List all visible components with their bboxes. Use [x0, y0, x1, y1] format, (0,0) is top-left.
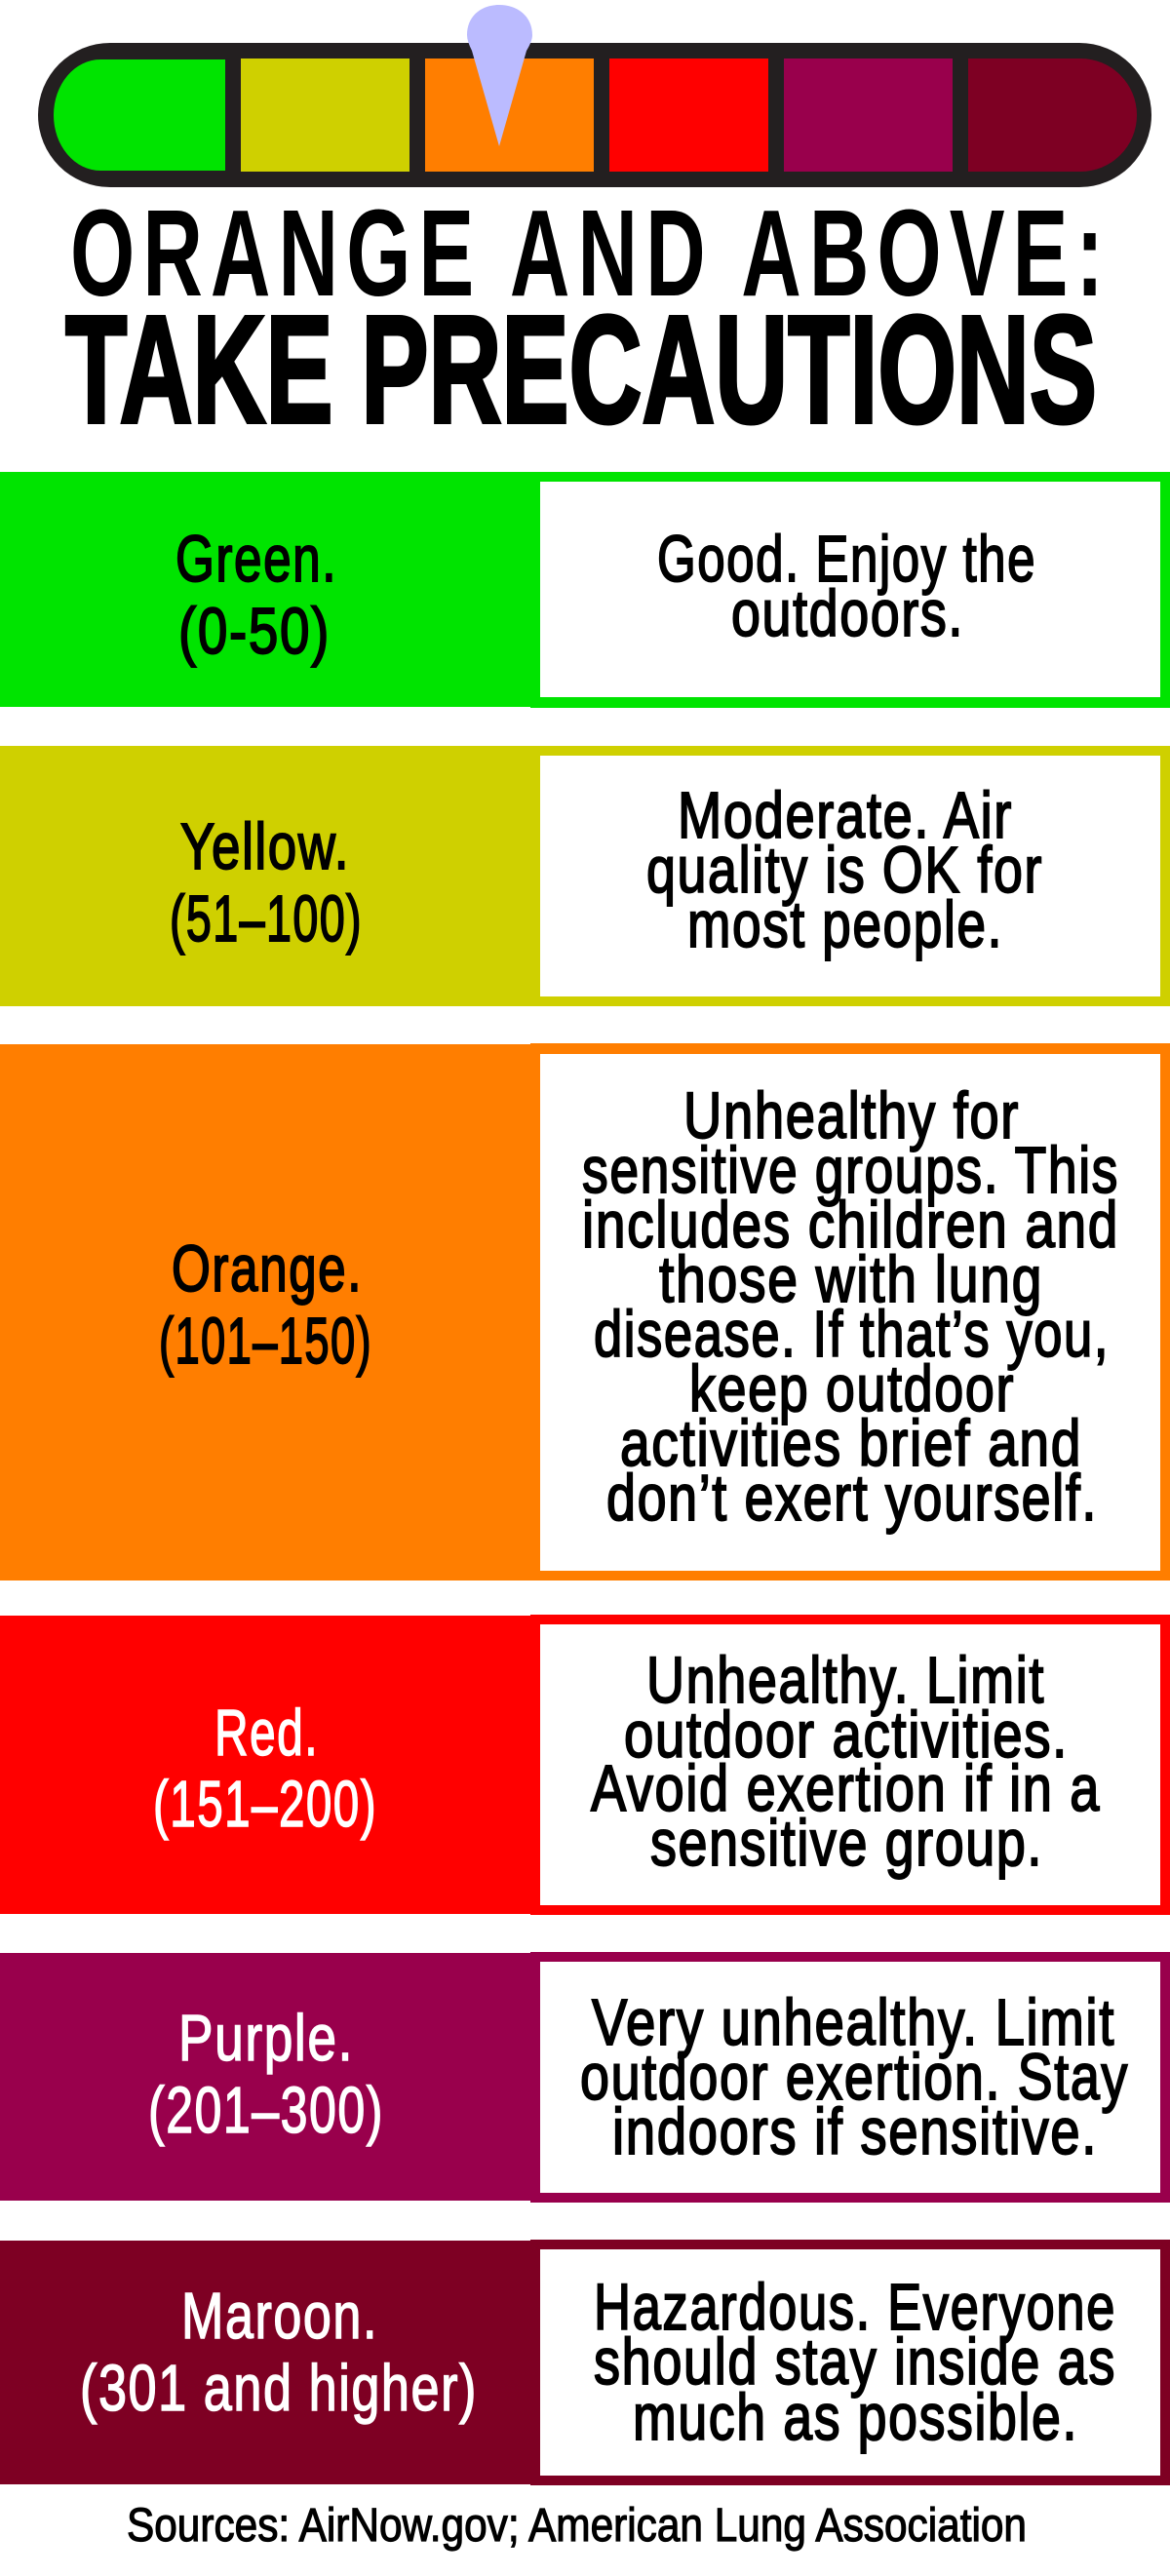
green description	[657, 523, 1036, 650]
yellow description	[646, 779, 1043, 961]
orange label: Orange.	[172, 1232, 363, 1306]
red label	[153, 1697, 377, 1841]
maroon description	[594, 2271, 1116, 2454]
green description: outdoors.	[731, 577, 964, 650]
orange label	[159, 1232, 372, 1378]
green label	[176, 523, 337, 668]
orange description: activities brief and	[620, 1407, 1082, 1480]
green description: Good. Enjoy the	[657, 523, 1036, 596]
green label: Green.	[176, 523, 337, 596]
purple label: (201–300)	[148, 2074, 384, 2147]
orange description: keep outdoor	[689, 1352, 1015, 1425]
icon: gauge pointer	[467, 5, 532, 146]
yellow label: Yellow.	[180, 810, 350, 883]
panel: red	[0, 1615, 1170, 1915]
panel: green	[0, 472, 1170, 708]
maroon label: Maroon.	[181, 2280, 378, 2353]
panel: maroon	[0, 2240, 1170, 2485]
yellow label: (51–100)	[170, 882, 363, 956]
green label: (0-50)	[178, 595, 331, 668]
red description: sensitive group.	[650, 1807, 1043, 1880]
yellow label	[170, 810, 363, 956]
orange description: those with lung	[659, 1243, 1043, 1316]
orange description: Unhealthy for	[683, 1079, 1020, 1152]
red description: Unhealthy. Limit	[646, 1644, 1045, 1717]
title	[65, 184, 1112, 455]
purple label: Purple.	[178, 2002, 354, 2075]
panel: orange	[0, 1043, 1170, 1581]
panel: purple	[0, 1952, 1170, 2203]
panel: yellow	[0, 746, 1170, 1006]
orange label: (101–150)	[159, 1305, 372, 1378]
red description	[591, 1644, 1101, 1880]
maroon label	[80, 2280, 478, 2425]
sources: Sources: AirNow.gov; American Lung Association	[127, 2500, 1027, 2552]
purple label	[148, 2002, 384, 2147]
orange description	[582, 1079, 1119, 1535]
red label: Red.	[214, 1697, 319, 1770]
yellow description: Moderate. Air	[678, 779, 1013, 852]
maroon label: (301 and higher)	[80, 2352, 478, 2425]
red description: outdoor activities.	[624, 1698, 1069, 1772]
yellow description: quality is OK for	[646, 834, 1043, 907]
yellow description: most people.	[687, 888, 1003, 961]
red label: (151–200)	[153, 1768, 377, 1841]
purple description	[580, 1986, 1129, 2168]
AQI gauge	[38, 5, 1151, 187]
